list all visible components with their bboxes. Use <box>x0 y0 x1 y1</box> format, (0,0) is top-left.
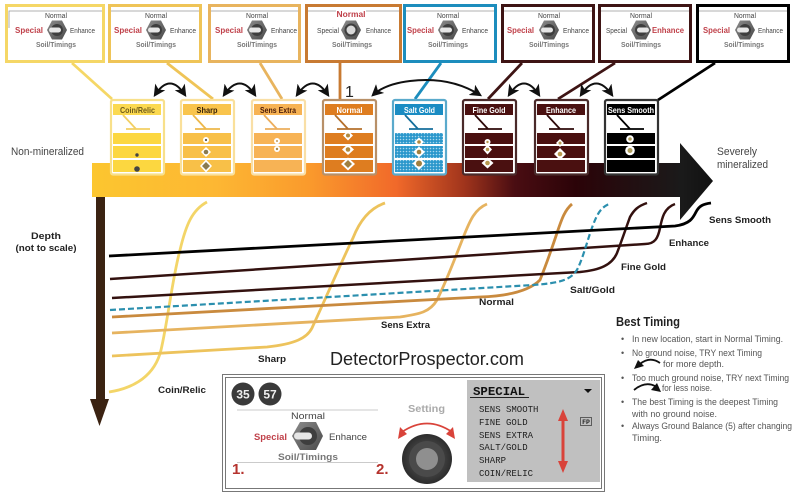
setting box: Sens Smooth: Normal <box>734 13 756 20</box>
setting box: Sens Smooth: Soil/Timings <box>724 42 764 49</box>
setting box: Sharp: Soil/Timings <box>136 42 176 49</box>
setting box: Enhance: Soil/Timings <box>621 42 661 49</box>
curve labels: Salt/Gold <box>570 285 615 296</box>
setting box: Enhance <box>600 6 690 62</box>
setting box: Sens Extra: Enhance <box>271 28 297 35</box>
step number 1: 1. <box>232 461 245 478</box>
site name: DetectorProspector.com <box>330 348 524 369</box>
setting box: Enhance: Normal <box>630 13 652 20</box>
label: depth <box>16 231 76 254</box>
best timing tips: for less noise. <box>662 383 712 393</box>
timing switch: Special <box>254 432 287 442</box>
best timing tips: for more depth. <box>663 359 724 369</box>
setting box: Normal: Enhance <box>366 28 391 35</box>
indicator circles <box>232 382 282 406</box>
special menu screen: SPECIAL <box>473 385 525 399</box>
label: depth: (not to scale) <box>16 243 76 254</box>
setting box: Salt Gold: Special <box>407 26 434 35</box>
curve labels: Sens Extra <box>381 320 431 331</box>
card: Sens Smooth: Sens Smooth <box>608 105 654 115</box>
setting box: Sens Extra: Normal <box>246 13 268 20</box>
best timing tips: • <box>621 334 624 344</box>
card: Fine Gold <box>463 100 516 174</box>
panel: detector display <box>222 374 604 492</box>
best timing tips: Best Timing <box>616 315 680 329</box>
setting box: Salt Gold: Normal <box>437 13 459 20</box>
best timing tips: The best Timing is the deepest Timing <box>632 397 778 407</box>
label: severely mineralized: mineralized <box>717 159 768 171</box>
depth axis arrow <box>90 197 109 426</box>
depth curves chart <box>109 202 711 392</box>
setting box: Fine Gold: Special <box>507 26 534 35</box>
curved double arrows between timings <box>155 80 612 95</box>
setting box: Fine Gold: Enhance <box>563 28 589 35</box>
timing switch: Enhance <box>329 432 367 442</box>
setting box: Normal: Soil/Timings <box>332 42 372 49</box>
label: depth: Depth <box>31 231 61 242</box>
icon: arrow for less noise <box>634 383 661 392</box>
curve labels: Normal <box>479 297 514 308</box>
card: Normal: Normal <box>336 105 362 115</box>
indicator circles: 57 <box>263 388 277 402</box>
card: Normal <box>323 100 376 174</box>
setting box: Sens Smooth: Enhance <box>758 28 783 35</box>
label: non-mineralized: Non-mineralized <box>11 146 84 158</box>
step number 1: 1 <box>345 84 354 101</box>
setting box: Sens Extra <box>210 6 300 62</box>
setting box: Salt Gold <box>404 6 496 62</box>
best timing tips: In new location, start in Normal Timing. <box>632 334 783 344</box>
setting box: Fine Gold: Normal <box>538 13 560 20</box>
setting box: Normal: Special <box>317 28 339 35</box>
label: severely mineralized: Severely <box>717 146 757 158</box>
card: Coin/Relic: Coin/Relic <box>120 105 155 115</box>
setting box: Salt Gold: Enhance <box>462 28 488 35</box>
setting box: Sharp: Enhance <box>170 28 196 35</box>
special menu screen: SENS SMOOTH <box>479 405 538 415</box>
setting box: Coin/Relic: Enhance <box>70 28 95 35</box>
best timing tips: with no ground noise. <box>631 409 717 419</box>
best timing tips: • <box>621 373 624 383</box>
setting box: Sharp: Normal <box>145 13 167 20</box>
setting box: Enhance: Enhance <box>652 26 685 35</box>
best timing tips: • <box>621 348 624 358</box>
special menu screen: SENS EXTRA <box>479 431 534 441</box>
setting box: Sens Smooth <box>698 6 788 62</box>
setting box: Normal: Normal <box>336 10 366 19</box>
step number 2: 2. <box>376 461 389 478</box>
card: Salt Gold <box>393 100 446 174</box>
curve labels: Fine Gold <box>621 262 666 273</box>
special menu screen: COIN/RELIC <box>479 469 534 479</box>
best timing tips: No ground noise, TRY next Timing <box>632 348 762 358</box>
setting box: Normal <box>306 6 400 62</box>
timing switch: Soil/Timings <box>278 452 338 462</box>
special menu screen: FINE GOLD <box>479 418 528 428</box>
timing switch <box>237 410 378 462</box>
best timing tips <box>616 315 792 443</box>
card: Sens Extra: Sens Extra <box>260 105 296 115</box>
curve labels: Sens Smooth <box>709 215 771 226</box>
card: Enhance: Enhance <box>546 105 576 115</box>
icon: arrow for more depth <box>634 360 660 369</box>
setting box: Sharp <box>110 6 200 62</box>
best timing tips: Timing. <box>632 433 662 443</box>
special menu screen <box>467 380 600 482</box>
card: Fine Gold: Fine Gold <box>472 105 506 115</box>
setting box: Coin/Relic: Soil/Timings <box>36 42 76 49</box>
curve labels: Sharp <box>258 354 286 365</box>
card: Sens Extra <box>252 100 305 174</box>
best timing tips: • <box>621 421 624 431</box>
special menu screen: FP <box>582 419 590 426</box>
card: Sharp: Sharp <box>196 105 218 115</box>
timing switch: Normal <box>291 411 325 421</box>
card: Sharp <box>181 100 234 174</box>
setting dial <box>398 404 455 484</box>
special menu screen: SHARP <box>479 456 506 466</box>
setting box: Coin/Relic: Normal <box>45 13 67 20</box>
card: Enhance <box>535 100 588 174</box>
setting box: Sens Extra: Special <box>215 26 243 35</box>
best timing tips: • <box>621 397 624 407</box>
setting box: Fine Gold: Soil/Timings <box>529 42 569 49</box>
leader lines from boxes to cards <box>72 63 715 100</box>
indicator circles: 35 <box>236 388 250 402</box>
setting box: Coin/Relic <box>6 6 104 62</box>
setting box: Sens Smooth: Special <box>703 26 730 35</box>
best timing tips: Always Ground Balance (5) after changing <box>632 421 792 431</box>
card: Salt Gold: Salt Gold <box>404 105 435 115</box>
setting box: Fine Gold <box>502 6 594 62</box>
setting box: Coin/Relic: Special <box>15 26 43 35</box>
setting box: Sens Extra: Soil/Timings <box>237 42 277 49</box>
setting box: Sharp: Special <box>114 26 142 35</box>
card: Sens Smooth <box>605 100 658 174</box>
gradient mineralization arrow <box>92 143 713 220</box>
setting box: Salt Gold: Soil/Timings <box>428 42 468 49</box>
curve labels: Coin/Relic <box>158 385 206 396</box>
label: severely mineralized <box>717 146 768 171</box>
best timing tips: Too much ground noise, TRY next Timing <box>632 373 789 383</box>
curve labels <box>158 215 771 396</box>
curve labels: Enhance <box>669 238 709 249</box>
setting dial: Setting <box>408 404 445 415</box>
setting box: Enhance: Special <box>606 28 627 35</box>
special menu screen: SALT/GOLD <box>479 443 528 453</box>
card: Coin/Relic <box>111 100 164 174</box>
